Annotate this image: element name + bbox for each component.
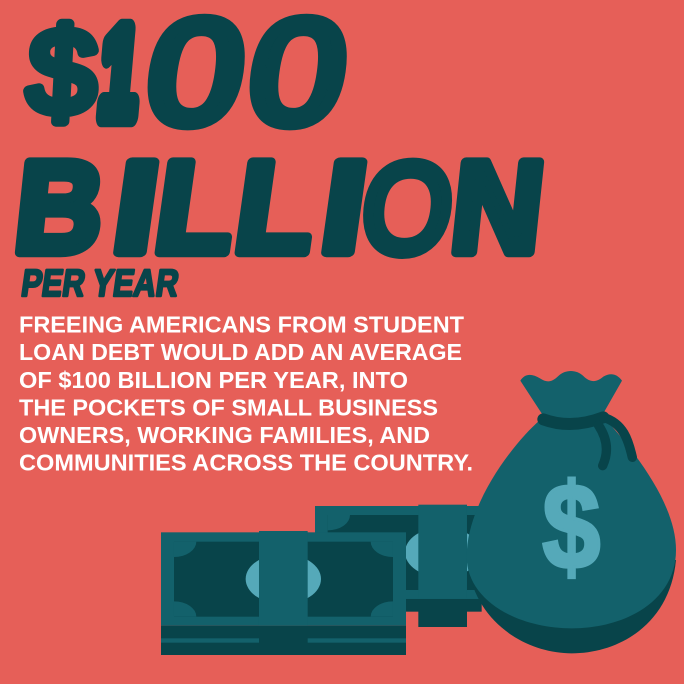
headline: $100: $ xyxy=(25,4,100,139)
body text block: FREEING AMERICANS FROM STUDENT xyxy=(19,312,464,338)
headline: BILLION: N xyxy=(445,135,550,280)
icon: money bag: $ xyxy=(542,459,600,595)
body text block: OF $100 BILLION PER YEAR, INTO xyxy=(19,367,408,393)
headline: BILLION: O xyxy=(356,137,459,279)
body text block: COMMUNITIES ACROSS THE COUNTRY. xyxy=(19,450,473,476)
body text block: THE POCKETS OF SMALL BUSINESS xyxy=(19,394,438,420)
icon: back stack of bills xyxy=(305,500,482,627)
headline: BILLION: B xyxy=(9,134,111,280)
body text block xyxy=(19,312,473,476)
body text block: OWNERS, WORKING FAMILIES, AND xyxy=(19,422,430,448)
headline: BILLION: L xyxy=(147,135,245,280)
body text block: LOAN DEBT WOULD ADD AN AVERAGE xyxy=(19,339,462,365)
subheading: per year: PER YEAR xyxy=(19,263,181,305)
headline: BILLION: L xyxy=(227,135,325,280)
headline: BILLION: I xyxy=(105,134,167,280)
headline: $100: 1 xyxy=(95,4,144,143)
icon: money bag xyxy=(467,371,676,653)
headline: BILLION xyxy=(9,134,550,280)
headline: $100 xyxy=(25,0,357,154)
headline: BILLION: I xyxy=(313,134,375,280)
icon: front stack of bills xyxy=(161,531,406,655)
